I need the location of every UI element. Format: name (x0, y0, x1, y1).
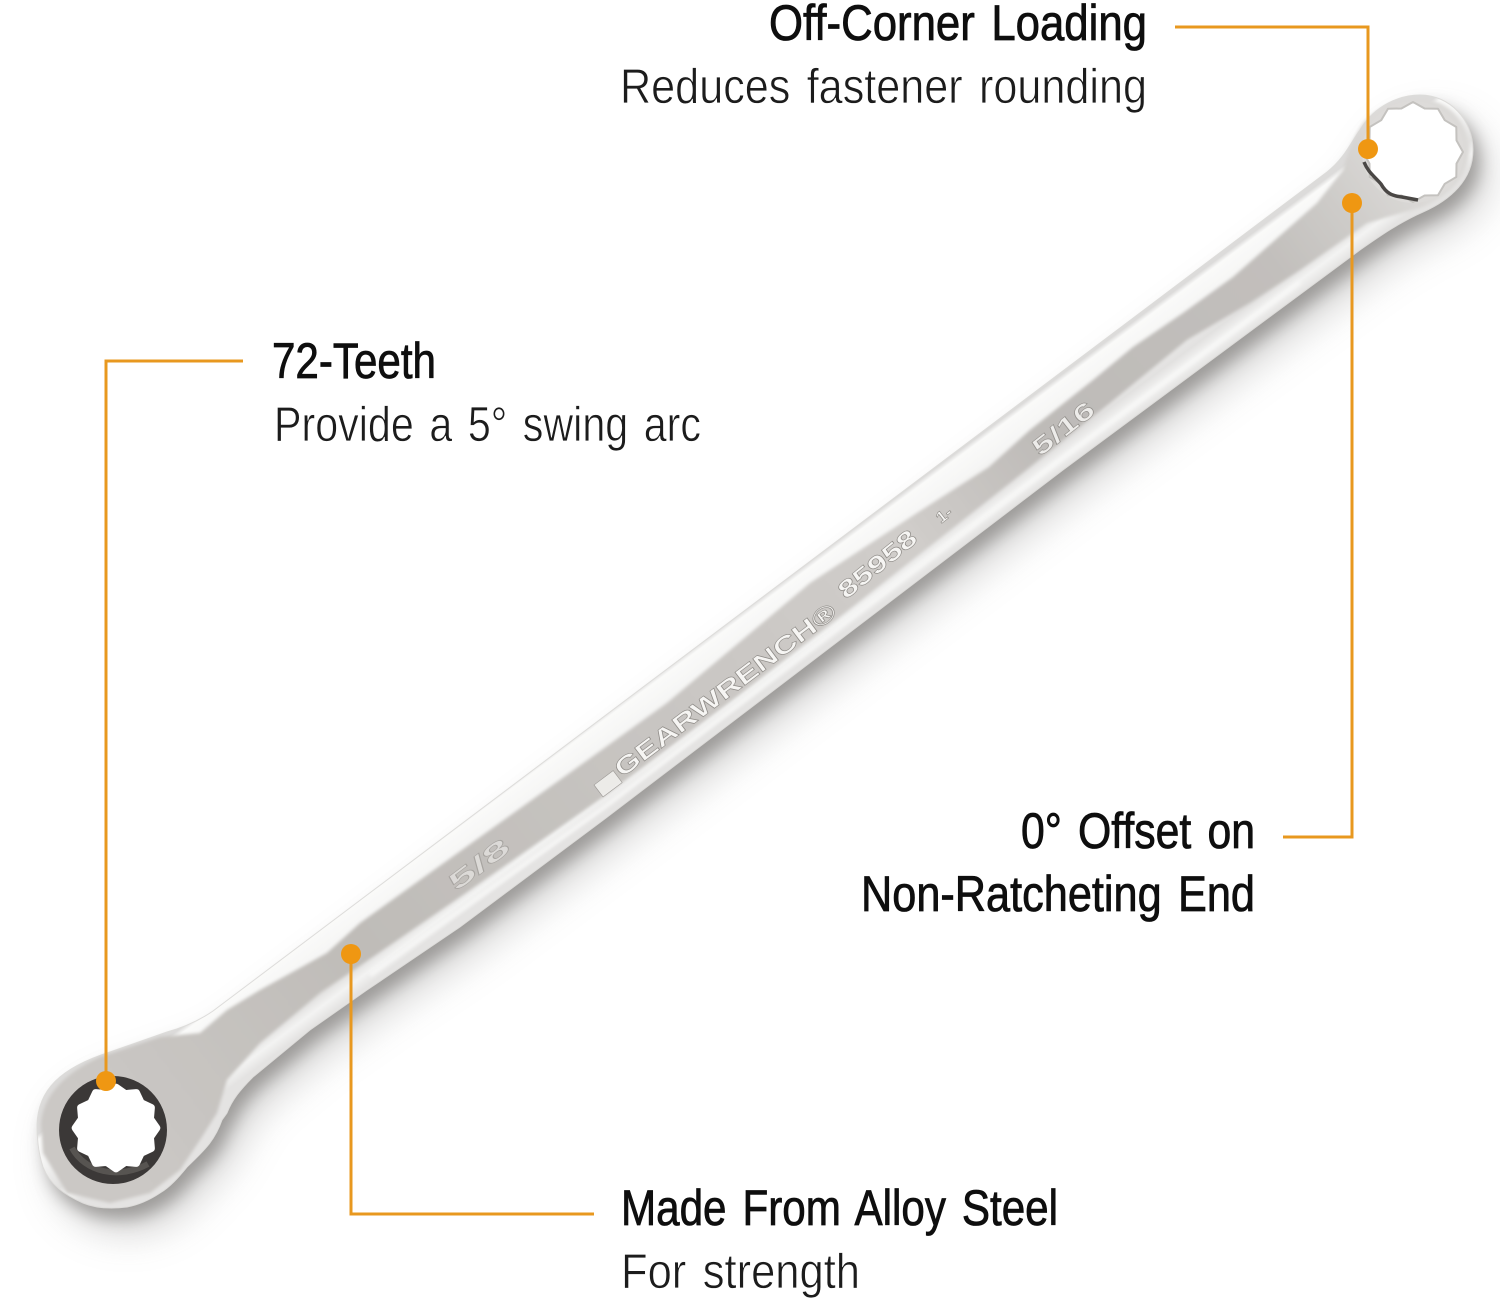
callout: off-corner loading (620, 0, 1378, 159)
engraved brand: GEARWRENCH® (609, 598, 842, 783)
ratchet end wall shading (72, 1148, 148, 1172)
box end opening (1363, 102, 1463, 202)
box end dark teeth (1364, 162, 1418, 200)
engraved lower size: 5/8 (443, 833, 516, 897)
ratchet end dark ring (59, 1076, 167, 1184)
leader line (351, 954, 594, 1214)
heading: Made From Alloy Steel (621, 1180, 1058, 1236)
leader line (1283, 203, 1352, 837)
heading: 72-Teeth (272, 333, 436, 389)
dot (1342, 193, 1362, 213)
leader line (106, 361, 243, 1081)
dot (1358, 139, 1378, 159)
leader line (1175, 27, 1368, 149)
callout: alloy steel (341, 944, 1058, 1299)
dot (96, 1071, 116, 1091)
engraved small mark: 1- (933, 504, 956, 527)
box end wall (1362, 101, 1464, 203)
ratchet end opening (76, 1088, 156, 1168)
heading line two: Non-Ratcheting End (861, 866, 1255, 922)
engraved upper size: 5/16 (1027, 396, 1100, 462)
description: Reduces fastener rounding (620, 60, 1147, 114)
lower bevel highlight (370, 282, 1300, 975)
engraved logo mark (594, 771, 622, 797)
description: For strength (621, 1245, 860, 1299)
description: Provide a 5° swing arc (274, 398, 701, 452)
dot (341, 944, 361, 964)
engraved part number: 85958 (833, 525, 923, 605)
heading: 0° Offset on (1021, 803, 1255, 859)
callout: 0 degree offset (861, 193, 1362, 922)
callout: 72-teeth (96, 333, 701, 1091)
